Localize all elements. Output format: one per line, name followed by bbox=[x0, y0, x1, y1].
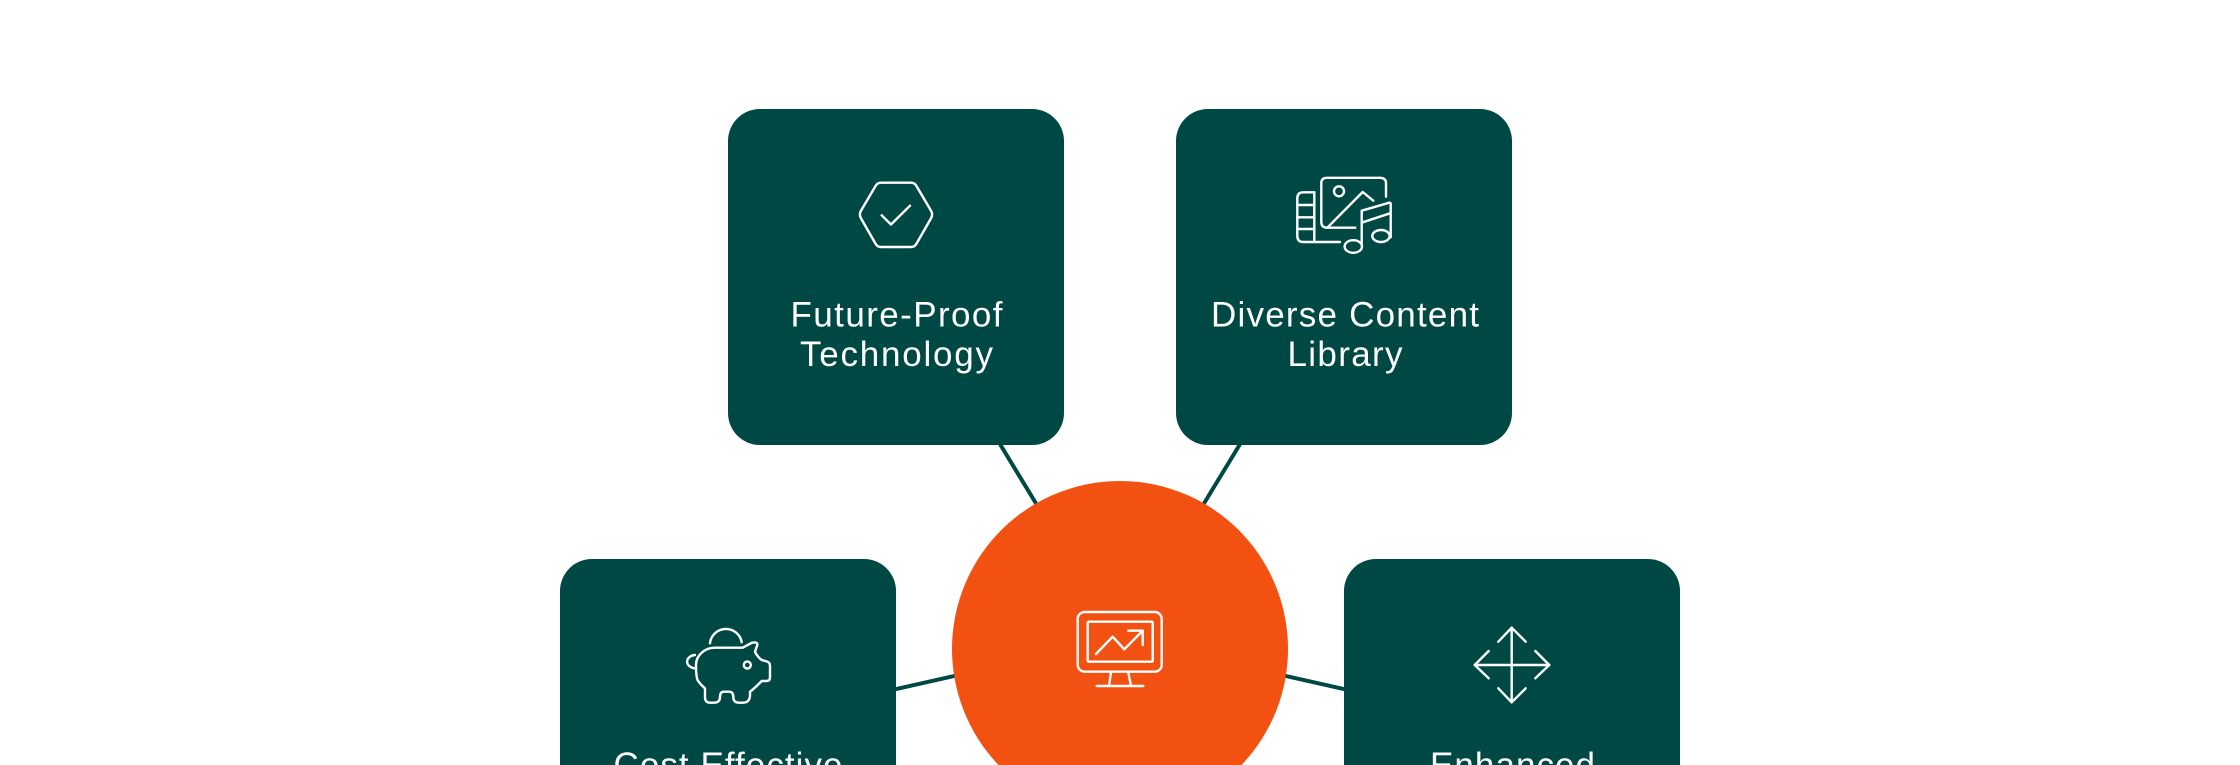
icon: four-way arrows bbox=[1475, 628, 1549, 702]
connector: future-proof technology to hub bbox=[998, 440, 1040, 510]
connector: enhanced to hub bbox=[1280, 675, 1350, 690]
panel: future-proof technology bbox=[728, 109, 1064, 445]
icon: monitor with rising chart bbox=[1078, 612, 1162, 686]
card background bbox=[728, 109, 1064, 445]
label: Future-Proof Technology: Future-Proof bbox=[790, 296, 1003, 334]
label: Future-Proof Technology: Technology bbox=[800, 335, 994, 374]
icon: image, film strip and music note bbox=[1297, 178, 1391, 253]
panel: diverse content library bbox=[1176, 109, 1512, 445]
card background bbox=[560, 559, 896, 765]
connector: diverse content library to hub bbox=[1200, 440, 1242, 510]
label: Future-Proof Technology bbox=[790, 296, 1003, 374]
card background bbox=[1176, 109, 1512, 445]
connector: cost effective to hub bbox=[890, 675, 960, 690]
label: Diverse Content Library bbox=[1211, 296, 1479, 374]
label: Diverse Content Library: Library bbox=[1288, 335, 1403, 374]
icon: piggy bank bbox=[687, 629, 770, 703]
card background bbox=[1344, 559, 1680, 765]
hub circle bbox=[952, 481, 1288, 765]
icon: hexagon check bbox=[860, 183, 932, 247]
panel: central hub bbox=[952, 481, 1288, 765]
panel: enhanced bbox=[1344, 559, 1680, 765]
panel: cost effective bbox=[560, 559, 896, 765]
label: Diverse Content Library: Diverse Content bbox=[1211, 296, 1479, 334]
